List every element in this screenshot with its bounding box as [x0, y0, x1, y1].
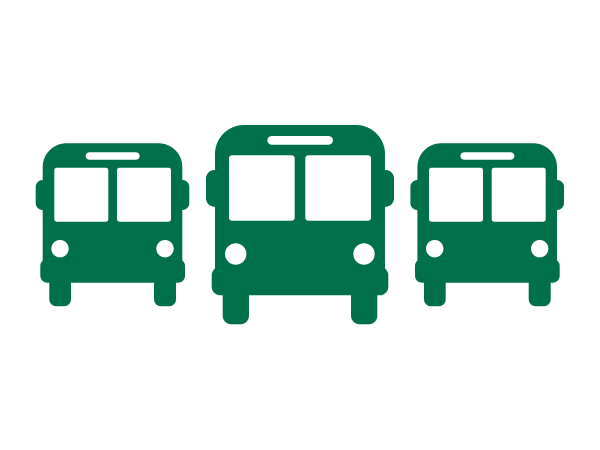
icon: center bus	[206, 125, 394, 324]
icon: left bus	[36, 143, 189, 306]
icon: right bus	[410, 143, 564, 306]
